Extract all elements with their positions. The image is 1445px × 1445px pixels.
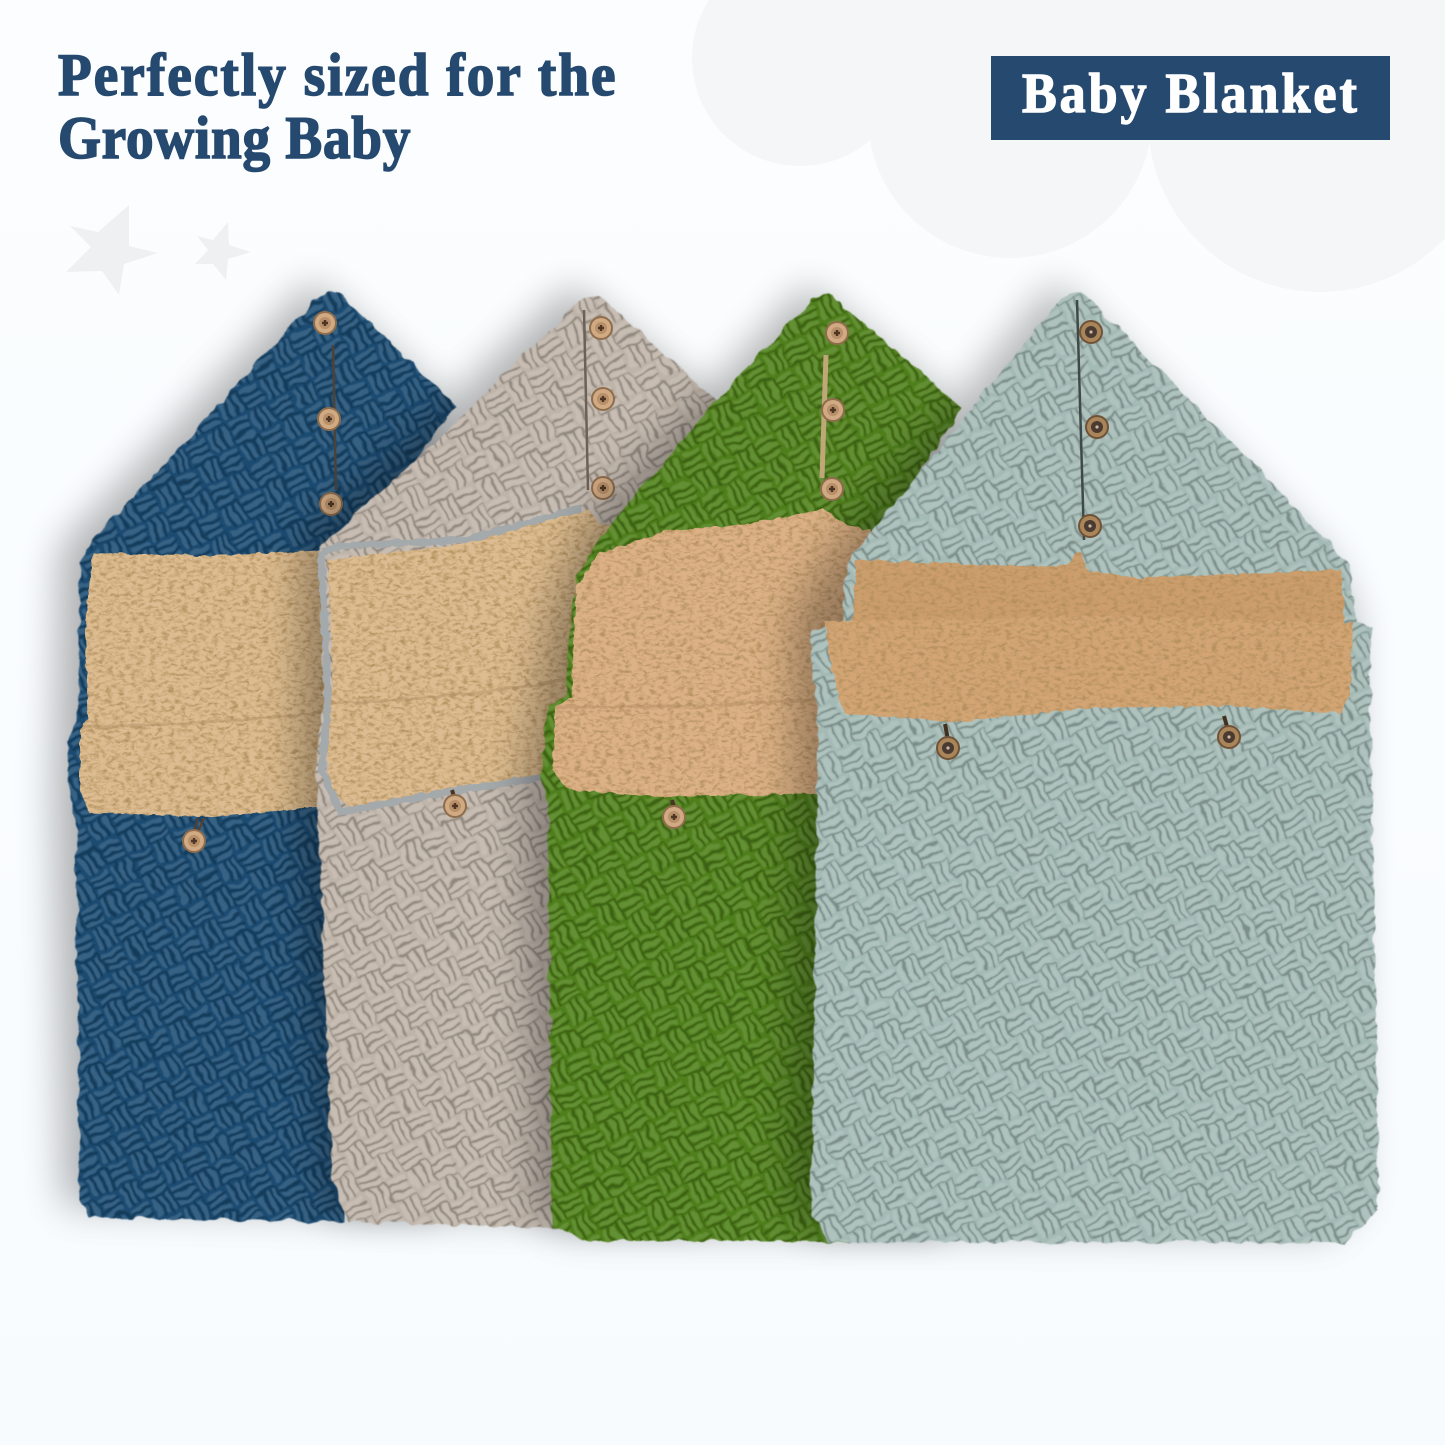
teal shell: [811, 292, 1379, 1243]
navy lining: [80, 550, 345, 817]
grey hood seam: [584, 310, 588, 490]
blanket: navy blue: [54, 282, 456, 1222]
title: Growing Baby: [58, 106, 411, 172]
green shell: [542, 296, 962, 1241]
navy hood seam: [333, 345, 336, 490]
title: Perfectly sized for the: [58, 43, 616, 109]
title: [58, 43, 616, 172]
cloud decoration: [692, 0, 1445, 292]
badge: Baby Blanket: Baby Blanket: [1022, 62, 1357, 124]
teal buttons: [936, 320, 1241, 760]
teal hood seam: [1077, 300, 1084, 540]
blanket: sage teal: [790, 282, 1379, 1243]
navy buttons: [182, 311, 343, 853]
grey lining: [325, 510, 620, 807]
star decorations: [66, 205, 251, 295]
teal fold-over flap: [825, 616, 1353, 722]
badge: Baby Blanket: [991, 56, 1390, 140]
navy shell: [68, 293, 456, 1222]
green lining: [552, 509, 870, 797]
green hood seam: [822, 355, 826, 478]
grey shell: [316, 296, 722, 1228]
grey piping: [321, 508, 581, 812]
grey buttons: [443, 316, 615, 818]
teal back lining: [852, 552, 1345, 630]
green buttons: [662, 321, 849, 829]
blanket: moss green: [524, 286, 962, 1241]
blanket: taupe grey: [300, 286, 722, 1228]
